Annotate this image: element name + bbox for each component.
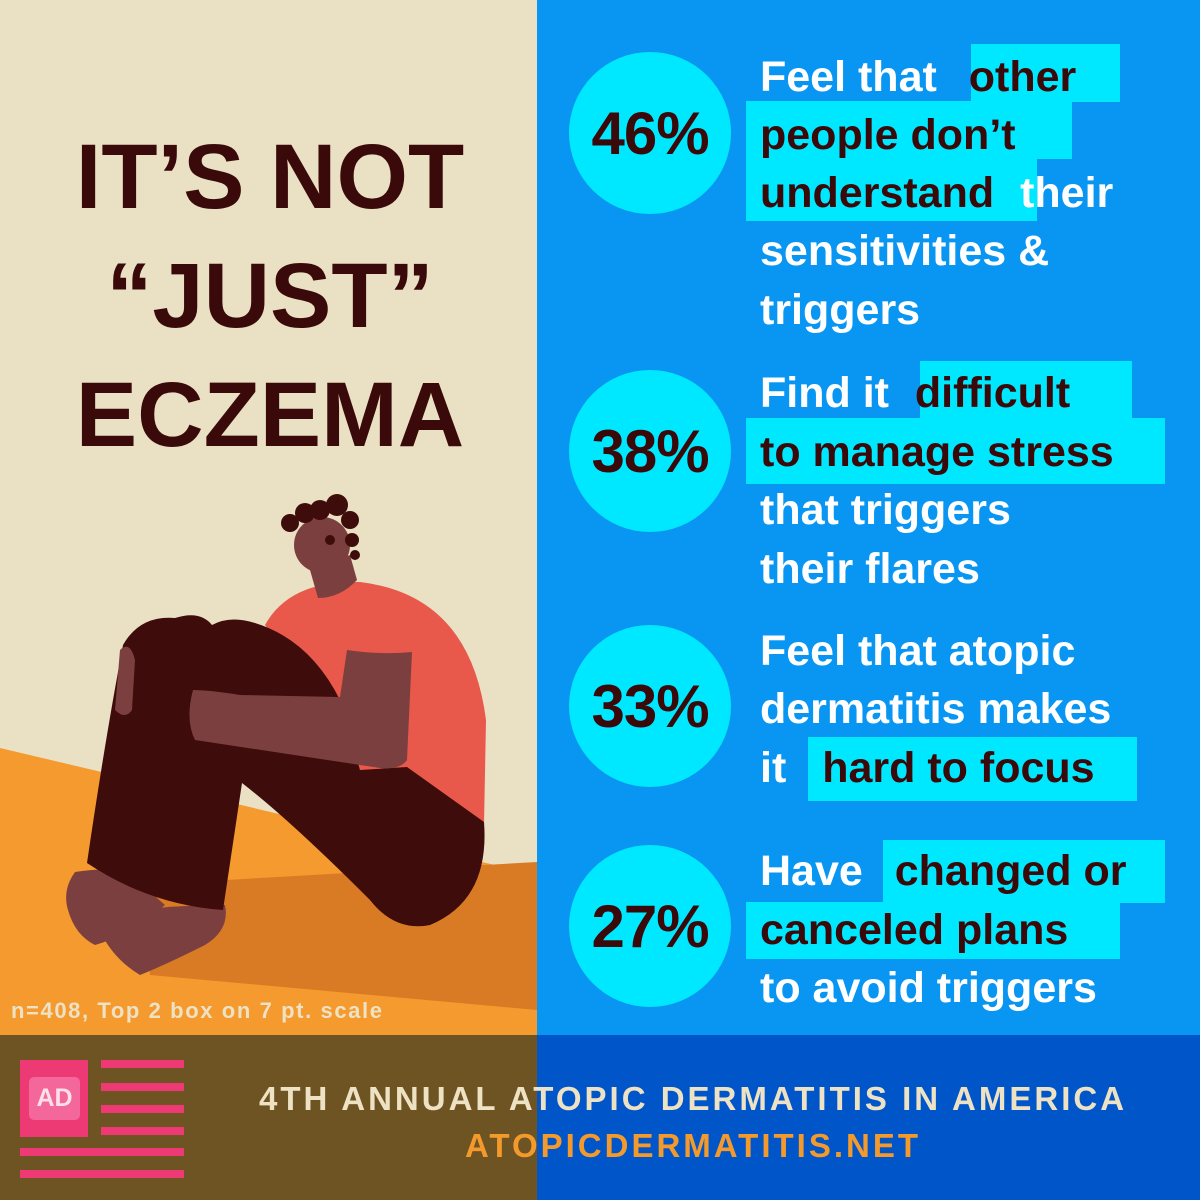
footnote: n=408, Top 2 box on 7 pt. scale	[11, 998, 384, 1023]
stat 1: Feel that other	[760, 53, 1076, 101]
stat 1: sensitivities &	[760, 227, 1049, 275]
title	[76, 126, 464, 466]
stat 4: Have changed or	[760, 847, 1127, 895]
stat 3: Feel that atopic	[760, 627, 1075, 675]
stat 1: triggers	[760, 286, 920, 334]
hair	[281, 494, 360, 560]
circle: 27%	[569, 845, 731, 1007]
stat 4: canceled plans	[760, 906, 1068, 954]
stat 3	[569, 625, 1137, 801]
stat 2	[569, 361, 1165, 593]
circle: 33%	[569, 625, 731, 787]
circle: 38%: 38%	[591, 418, 709, 484]
footer url: ATOPICDERMATITIS.NET	[465, 1127, 921, 1164]
stat 2: that triggers	[760, 486, 1011, 534]
stat 1: people don’t	[760, 111, 1016, 159]
title: ECZEMA	[76, 364, 464, 466]
logo: AD flag: AD	[36, 1084, 73, 1112]
stat 3: it hard to focus	[760, 744, 1095, 792]
stat 1: understand their	[760, 169, 1113, 217]
logo: AD flag	[20, 1060, 184, 1178]
footer	[0, 1035, 1200, 1200]
stat 3: dermatitis makes	[760, 685, 1111, 733]
title: IT’S NOT	[76, 126, 464, 228]
stat 4	[569, 840, 1165, 1012]
panel: left background	[0, 0, 537, 1035]
stat 4: to avoid triggers	[760, 964, 1097, 1012]
circle: 46%: 46%	[591, 100, 709, 166]
circle: 33%: 33%	[591, 672, 709, 740]
head	[294, 517, 350, 573]
neck	[310, 555, 357, 598]
stat 2: their flares	[760, 545, 980, 593]
arm and hands	[189, 650, 412, 768]
pants	[87, 615, 485, 926]
title: “JUST”	[106, 245, 434, 347]
stat 2: to manage stress	[760, 428, 1114, 476]
footer title: 4TH ANNUAL ATOPIC DERMATITIS IN AMERICA	[259, 1080, 1127, 1117]
panel: right background	[537, 0, 1200, 1035]
stat 1	[569, 44, 1120, 334]
circle: 27%: 27%	[591, 892, 709, 960]
stat 2: Find it difficult	[760, 369, 1070, 417]
feet	[66, 869, 165, 945]
illustration: sitting person	[0, 494, 537, 1035]
circle: 38%	[569, 370, 731, 532]
circle: 46%	[569, 52, 731, 214]
shirt	[265, 582, 486, 825]
